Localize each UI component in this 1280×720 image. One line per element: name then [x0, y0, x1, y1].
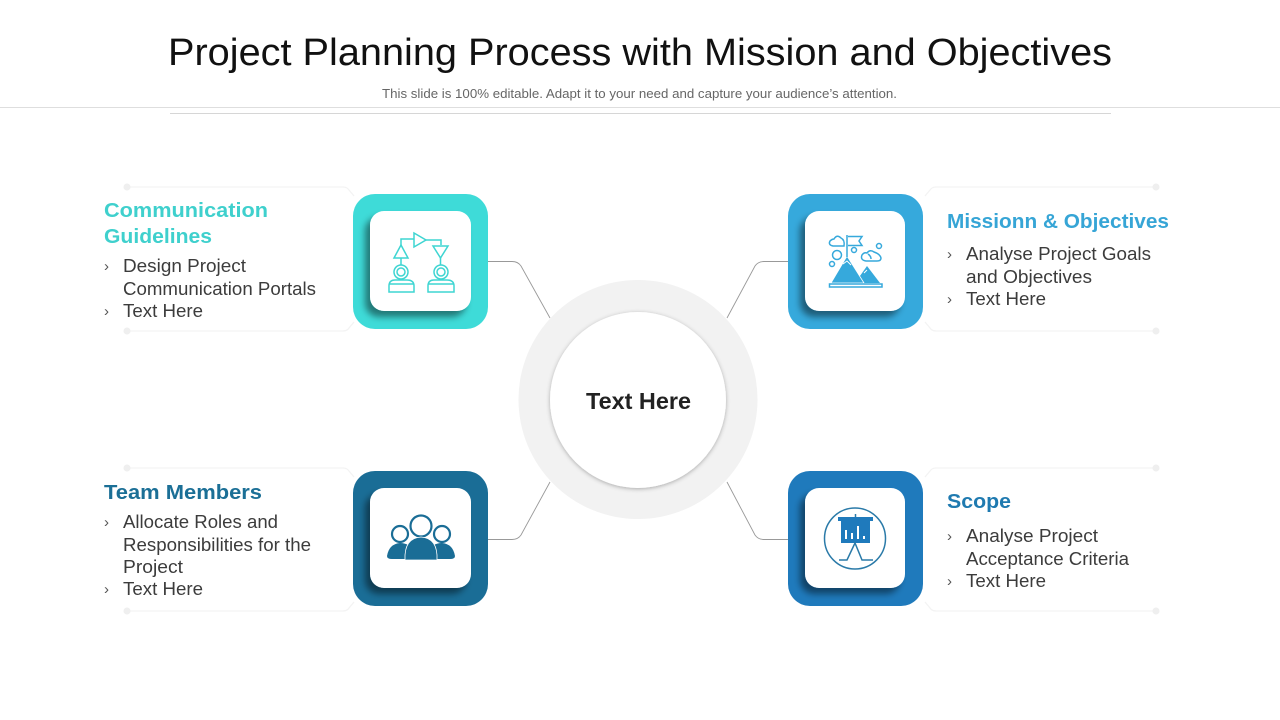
- connector: top left: [488, 262, 550, 318]
- heading: Communication: [104, 199, 268, 222]
- bullet list: Text Here: [123, 300, 203, 321]
- bullet list: Text Here: [123, 578, 203, 599]
- panel: mission and objectives: [925, 184, 1169, 334]
- icon: presentation board: [824, 508, 886, 569]
- bullet list: Responsibilities for the: [123, 534, 311, 555]
- bullet list: Allocate Roles and: [123, 511, 278, 532]
- connector: bottom left: [488, 482, 550, 540]
- bullet list: [947, 525, 1130, 591]
- bullet list: ›: [104, 581, 109, 598]
- bullet list: ›: [104, 514, 109, 531]
- bullet list: Text Here: [966, 288, 1046, 309]
- bullet list: Design Project: [123, 255, 246, 276]
- bullet list: ›: [947, 528, 952, 545]
- bullet list: ›: [104, 258, 109, 275]
- subtitle: This slide is 100% editable. Adapt it to your need and capture your audience’s attention.: [382, 87, 897, 101]
- panel: communication guidelines: [104, 184, 354, 334]
- heading: Guidelines: [104, 225, 212, 248]
- bullet list: ›: [104, 303, 109, 320]
- heading: Missionn & Objectives: [947, 210, 1169, 233]
- bullet list: [104, 511, 311, 599]
- icon: flow between people: [389, 233, 454, 292]
- bullet list: ›: [947, 291, 952, 308]
- central circle: [518, 280, 758, 519]
- bullet list: Text Here: [966, 570, 1046, 591]
- panel: team members: [104, 464, 354, 614]
- bullet list: Acceptance Criteria: [966, 548, 1130, 569]
- heading: Scope: [947, 490, 1011, 513]
- icon: three people: [387, 516, 455, 560]
- bullet list: and Objectives: [966, 266, 1092, 287]
- icon: mountain with flag: [829, 235, 882, 287]
- bullet list: Analyse Project Goals: [966, 243, 1151, 264]
- tile: team members: [353, 471, 488, 606]
- central label: Text Here: [586, 388, 691, 414]
- tile: mission and objectives: [788, 194, 923, 329]
- connector: top right: [727, 262, 788, 318]
- heading: [104, 199, 268, 248]
- panel: scope: [925, 464, 1160, 614]
- tile: communication guidelines: [353, 194, 488, 329]
- bullet list: Analyse Project: [966, 525, 1098, 546]
- bullet list: [104, 255, 316, 321]
- connector: bottom right: [727, 482, 788, 540]
- bullet list: Communication Portals: [123, 278, 316, 299]
- bullet list: ›: [947, 573, 952, 590]
- tile: scope: [788, 471, 923, 606]
- heading: Team Members: [104, 481, 262, 504]
- bullet list: Project: [123, 556, 183, 577]
- title: Project Planning Process with Mission and Objectives: [168, 32, 1112, 74]
- bullet list: [947, 243, 1151, 309]
- bullet list: ›: [947, 246, 952, 263]
